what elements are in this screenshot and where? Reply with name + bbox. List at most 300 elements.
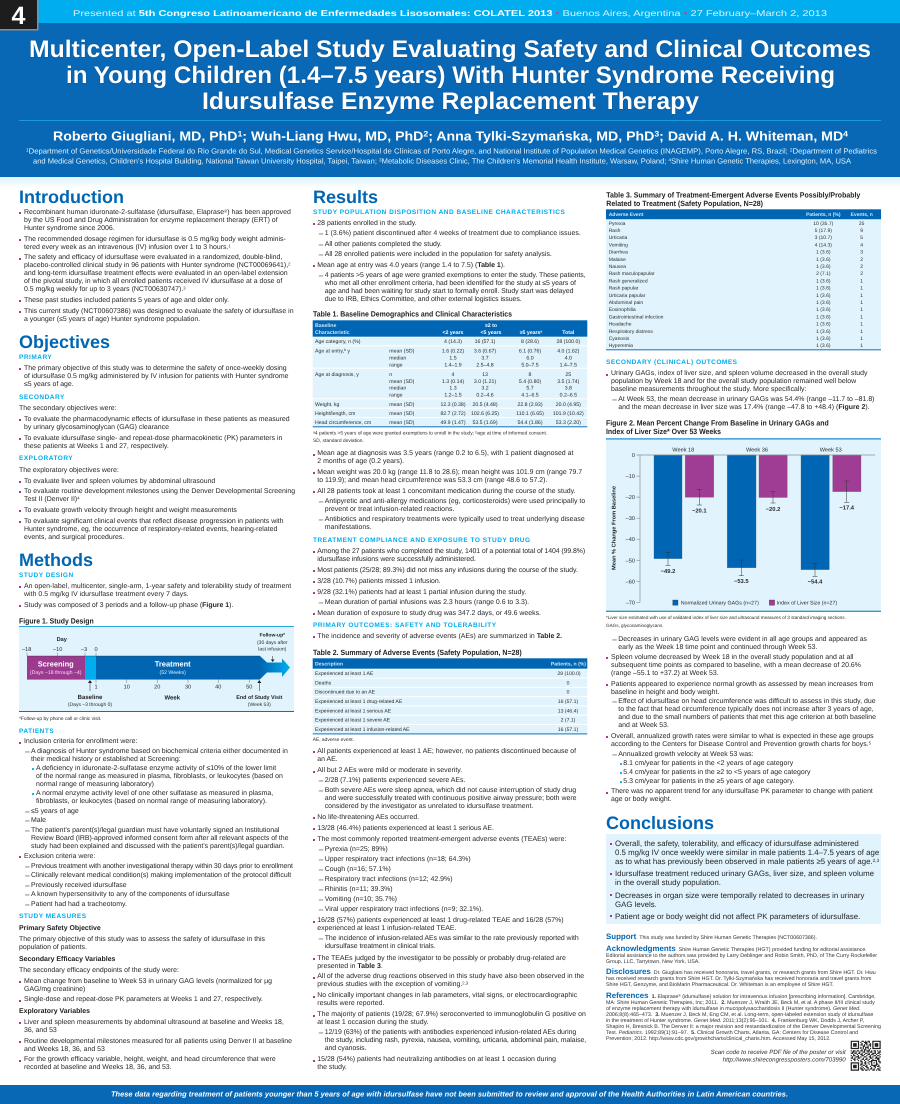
text: exposure: Mean duration of exposure to study drug was 347.2 days, or 49.6 weeks. (317, 610, 541, 617)
top conference band (0, 0, 900, 23)
table rows: 10 (35.7) (813, 221, 834, 227)
table rows: 4 (860, 242, 863, 248)
text: references: of enzyme replacement therapy with idursulfase in mucopolysaccharidosis II (Hunter syndrome). Genet Med. (606, 1006, 861, 1012)
text: viral: Viral upper respiratory tract infections (n=9; 32.1%). (325, 906, 483, 913)
text: developmental milestones: and Weeks 18, 36, and 53 (24, 1046, 105, 1053)
text: spleen: Spleen volume decreased by Week 18 in the overall study population and at all (611, 654, 853, 661)
table rows: 1 (860, 314, 863, 320)
value labels: −17.4 (839, 506, 855, 512)
y axis title: Mean % Change From Baseline (612, 486, 618, 570)
poster number badge (0, 0, 38, 30)
table rows: Experienced at least 1 drug-related AE (315, 699, 403, 705)
text: annualized: according to the Centers for Disease Control and Prevention growth charts for boys.5 (611, 740, 871, 748)
value labels: −20.1 (692, 507, 707, 514)
text: developmental milestones: Routine developmental milestones measured for all patients using Denver II at baseline (24, 1038, 292, 1045)
text: exemptions: 4 patients >5 years of age were granted exemptions to enter the study. These patients, (325, 272, 586, 279)
text: references: MA: Shire Human Genetic Therapies, Inc; 2011. 2. Muenzer J, Wraith JE, Beck M, et al. A phase II/III clinical study (606, 1000, 875, 1006)
text: partial: 9/28 (32.1%) patients had at least 1 partial infusion during the study. (317, 589, 526, 596)
table rows: 16 (57.1) (475, 339, 496, 345)
table rows: Rash maculopapular (609, 271, 655, 277)
table rows: Pyrexia (609, 221, 626, 227)
panel: Results (312, 187, 588, 1071)
text: references: Test. Pediatrics. 1992;89(1):91–97. 5. Clinical Growth Charts. Atlanta, GA: Centers for Disease Control and (606, 1030, 858, 1036)
text: conclusion 2: in the overall study population. (615, 878, 721, 887)
text: current study: This current study (NCT00607386) was designed to evaluate the safety of idursulfase in (24, 308, 294, 315)
y axis labels (626, 453, 635, 606)
scan caption: http://www.shirecongressposters.com/703990 (723, 1056, 846, 1063)
end of study marker: End of Study Visit (236, 695, 283, 701)
heading: Objectives: Objectives (19, 332, 110, 352)
text: exclusion 2: Clinically relevant medical condition(s) making implementation of the protocol difficult (31, 872, 291, 879)
value labels: −20.2 (766, 506, 780, 513)
text: exclusion 4: A known hypersensitivity to any of the components of idursulfase (31, 891, 230, 898)
table rows: 1.4–1.9 (444, 362, 462, 368)
table title (606, 191, 861, 208)
table rows: Nausea (609, 264, 626, 270)
table rows: 3 (10.7) (815, 235, 832, 241)
text: deficiency (36, 765, 283, 789)
text: head circumference: Effect of idursulfase on head circumference was difficult to assess in this study, due (618, 698, 876, 705)
table rows: 1 (3.6) (816, 250, 831, 256)
day axis (22, 637, 98, 656)
text: approval: Recombinant human iduronate-2-sulfatase (idursulfase, Elaprase®) has been approved (24, 208, 291, 216)
table rows: 2 (860, 264, 863, 270)
end of study marker (236, 680, 283, 708)
table header (609, 212, 873, 218)
figure 2 footnote: *Liver size estimated with use of validated index of liver size and ultrasound measures of 3 standard imaging sections. (606, 615, 846, 620)
text: PK trend (611, 788, 873, 804)
table title: Table 3. Summary of Treatment-Emergent Adverse Events Possibly/Probably (606, 191, 861, 200)
text: growth variable: recorded at baseline and Weeks 18, 36, and 53. (24, 1064, 172, 1071)
text: GAG change: GAG/mg creatinine) (24, 986, 85, 993)
text: urinary GAGs (611, 370, 867, 394)
text: infusions: idursulfase infusions were successfully administered. (317, 556, 476, 563)
text: current study (24, 308, 294, 324)
day axis: –10 (53, 647, 62, 653)
authors: Roberto Giugliani, MD, PhD (53, 128, 223, 144)
poster number badge: 4 (12, 2, 26, 30)
text: references (606, 991, 881, 1042)
table rows: 22.8 (2.93) (517, 402, 543, 408)
subheading: patients: PATIENTS (19, 728, 54, 735)
table rows: Deaths (315, 680, 332, 686)
subheading: exploratory variables: Exploratory Variables (19, 1008, 90, 1015)
text: infusions: Among the 27 patients who completed the study, 1401 of a potential total of 1404 (99.8%) (317, 548, 585, 555)
text: GAG change: Mean change from baseline to Week 53 in urinary GAG levels (normalized for μg (24, 978, 272, 985)
text: antibiotics: manifestations. (325, 524, 372, 531)
table rows: 1 (860, 293, 863, 299)
text: lab parameters: results were reported. (317, 1000, 384, 1007)
table rows: 5 (17.9) (815, 228, 832, 234)
text: support: Support This study was funded by Shire Human Genetic Therapies (NCT00607386). (606, 932, 817, 941)
table 3: TEAEs (606, 191, 881, 350)
text: exemptions: age and had been waiting for study start to formally enroll. Study start was delayed (325, 288, 573, 295)
table rows: 25 (859, 221, 865, 227)
table rows: 1 (860, 343, 863, 349)
week labels: Week 53 (820, 446, 842, 453)
text: references: Shapiro H, Bresnick B. The Denver II: a major revision and restandardization of the Denver Developmental Screening (606, 1024, 881, 1030)
text: exemptions: due to IRB, Ethics Committee, and other external logistics issues. (325, 296, 522, 303)
text: primary safety: population of patients. (19, 944, 87, 951)
text: annualized (611, 733, 874, 749)
table header: Patients, n (%) (806, 212, 841, 218)
text: primary objective: of idursulfase 0.5 mg/kg administered by IV infusion for patients with Hunter syndrome (24, 373, 289, 380)
text: vomiting: Vomiting (n=10; 35.7%) (325, 896, 397, 903)
text: neutralizing: 15/28 (54%) patients had neutralizing antibodies on at least 1 occasion during (317, 1056, 556, 1063)
table rows: 102.6 (6.25) (471, 411, 499, 417)
text: prior evaluation: The safety and efficacy of idursulfase were evaluated in a randomized, double-blind, (24, 254, 282, 261)
table rows: 3.8 (565, 386, 572, 392)
table rows: 1 (3.6) (816, 293, 831, 299)
text: diagnosis (31, 748, 288, 764)
table rows: 1 (3.6) (816, 300, 831, 306)
table rows: 3.2 (481, 386, 489, 392)
table rows: 5.7 (526, 386, 534, 392)
table rows: mean (SD) (389, 411, 415, 417)
table rows: 1 (3.6) (816, 336, 831, 342)
table rows: 1 (860, 278, 863, 284)
table header: Description (315, 662, 343, 668)
table rows: 2 (7.1) (816, 271, 831, 277)
text: drug related (317, 917, 564, 933)
table 2 footnote: AE, adverse event. (313, 737, 354, 743)
screening bar (27, 656, 85, 679)
text: references: 2006;8(8):465–473. 3. Muenzer J, Beck M, Eng CM, et al. Long-term, open-labeled extension study of idursulfase (606, 1012, 873, 1018)
text: milestones: To evaluate routine development milestones using the Denver Developmental Screening (24, 488, 295, 495)
table rows: 1 (3.6) (816, 329, 831, 335)
text: pharmacokinetic: these patients at Weeks 1 and 27, respectively. (24, 443, 169, 450)
text: sleep apnea (325, 787, 576, 811)
table rows: 20.5 (4.48) (472, 402, 498, 408)
table rows: 3.7 (481, 356, 489, 362)
table rows: 8 (28.6) (521, 339, 539, 345)
affiliations: 4 (669, 158, 672, 163)
table header: Baseline (315, 323, 336, 329)
text: approval: Hunter syndrome since 2006. (24, 225, 115, 232)
text: pharmacokinetic (24, 435, 282, 451)
table rows: 1.2–1.5 (444, 392, 462, 398)
text: conclusion 1: Overall, the safety, tolerability, and efficacy of idursulfase administered (615, 839, 859, 848)
text: drug related: 16/28 (57%) patients experienced at least 1 drug-related TEAE and 16/28 (57%) (317, 917, 564, 924)
table 2: adverse events (312, 648, 588, 734)
table rows: 53.3 (2.20) (556, 420, 581, 426)
text: design (24, 583, 291, 599)
text: GAG decreases (618, 636, 867, 652)
week axis: 30 (185, 685, 191, 691)
table rows: 1 (860, 336, 863, 342)
table rows: mean (SD) (389, 379, 415, 385)
text: incidence (325, 935, 579, 951)
text: past studies: These past studies included patients 5 years of age and older only. (24, 297, 229, 304)
table rows (315, 671, 581, 733)
panel: Objectives (19, 332, 295, 541)
table rows: Malaise (609, 257, 626, 263)
figure 2 footnote: GAGs, glycosaminoglycans. (606, 623, 663, 628)
week axis: Week (165, 694, 181, 702)
table rows: Rash (609, 228, 621, 234)
text: RTI: Respiratory tract infections (n=12; 42.9%) (325, 876, 453, 883)
top conference band: Presented at 5th Congreso Latinoamericano de Enfermedades Lisosomales: COLATEL 2013 • Buenos Aires, Argentina • 27 February–March 2, 2013 (73, 8, 827, 18)
table rows: 49.9 (1.47) (440, 420, 466, 426)
table rows: 13 (46.4) (558, 708, 578, 714)
text: velocity 2: 5.4 cm/year for patients in the ≥2 to <5 years of age category (623, 769, 810, 776)
text: neutralizing: the study. (317, 1064, 347, 1071)
follow-up label: last infusion) (258, 646, 287, 652)
table rows: Experienced at least 1 AE (315, 671, 374, 677)
text: missed: 3/28 (10.7%) patients missed 1 infusion. (317, 578, 441, 585)
table rows: 5.4 (0.80) (519, 379, 541, 385)
heading: Methods: Methods (19, 550, 93, 570)
table rows: 54.4 (1.86) (517, 420, 543, 426)
week axis: 20 (154, 685, 160, 691)
baseline marker (68, 680, 112, 708)
baseline marker: Baseline (78, 694, 103, 701)
table rows: 1.3 (449, 386, 457, 392)
table rows: Respiratory distress (609, 329, 653, 335)
error bars (666, 481, 849, 576)
panel: support and references (606, 932, 881, 1071)
text: exclusion 3: Previously received idursulfase (31, 882, 127, 889)
table rows: 9 (860, 228, 863, 234)
table rows: Experienced at least 1 infusion-related AE (315, 727, 410, 733)
scan caption (711, 1049, 846, 1063)
text: antibodies (325, 1029, 586, 1053)
text: primary objective: The primary objective of this study was to determine the safety of once-weekly dosing (24, 365, 287, 372)
table rows: Age at diagnosis, y (315, 372, 359, 378)
text: age at diagnosis: Mean age at diagnosis was 3.5 years (range 0.2 to 6.5), with 1 patient diagnosed at (317, 450, 573, 457)
follow-up arrow (260, 656, 290, 679)
text: current study: a younger (≤5 years of age) Hunter syndrome population. (24, 316, 200, 323)
text: drug related: experienced at least 1 infusion-related TEAE. (317, 925, 456, 932)
table rows: 3.5 (1.74) (557, 379, 580, 385)
text: spleen: (range –55.1 to +37.2) at Week 53. (611, 670, 719, 677)
table rows: Gastrointestinal infection (609, 314, 664, 320)
text: male: Male (31, 817, 46, 824)
week axis: 40 (215, 685, 221, 691)
text: prior evaluation: and long-term idursulfase treatment effects were evaluated in an open-label extension (24, 270, 288, 277)
text: approval (24, 209, 291, 233)
text: milestones (24, 488, 295, 504)
text: clinical events: To evaluate significant clinical events that reflect disease progression in patients with (24, 518, 284, 525)
text: diagnosis: their medical history or established at Screening: (31, 756, 181, 763)
subheading: disposition: STUDY POPULATION DISPOSITION AND BASELINE CHARACTERISTICS (313, 209, 565, 216)
text: exclusion 5: Patient had had a tracheotomy. (31, 901, 127, 908)
y axis labels: –30 (626, 516, 635, 522)
text: pharmacodynamic: To evaluate the pharmacodynamic effects of idursulfase in these patients as measured (24, 416, 290, 423)
table rows: 1 (860, 286, 863, 292)
text: head circumference (618, 698, 876, 730)
text: antipyretic (325, 498, 585, 514)
follow-up label (257, 632, 288, 662)
text: GAG decreases: early as the Week 18 time point and continued through Week 53. (618, 644, 817, 651)
text: secondary efficacy intro: The secondary efficacy endpoints of the study were: (19, 967, 179, 974)
y axis labels: –60 (626, 579, 635, 585)
subheading: secondary: SECONDARY (19, 394, 65, 401)
text: clinical events (24, 518, 284, 542)
table rows: Age at entry, (315, 348, 344, 354)
table rows: Headache (609, 322, 632, 328)
table rows: 3 (860, 250, 863, 256)
table rows: Diarrhea (609, 250, 628, 256)
text: conclusion 3: GAG levels. (615, 900, 657, 909)
text: sleep apnea: and were successfully treated with continuous positive airway pressure; both were (325, 795, 576, 802)
text: sleep apnea: considered by the investigator as unrelated to idursulfase treatment. (325, 803, 533, 810)
follow-up label: (30 days after (257, 640, 288, 646)
affiliations: 3 (379, 158, 382, 163)
text: table 3 ref (317, 955, 566, 971)
text: dosage: tered every week as an intravenous (IV) infusion over 1 to 3 hours.1 (24, 243, 231, 251)
title: Multicenter, Open-Label Study Evaluating Safety and Clinical Outcomes (29, 36, 871, 63)
text: incidence: idursulfase treatment in clinical trials. (325, 943, 436, 950)
text: normal growth: Patients appeared to experience normal growth as assessed by mean increases from (611, 681, 873, 688)
text: mean weight: to 119.9); and mean head circumference was 53.3 cm (range 48.6 to 57.2). (317, 477, 547, 484)
table header: ≥2 to (485, 323, 497, 329)
table rows: median (389, 386, 406, 392)
table rows: 110.1 (6.65) (516, 411, 544, 417)
figure 2 footnote (606, 615, 846, 628)
figure 2: bar chart (606, 419, 881, 612)
table header: <2 years (443, 330, 464, 336)
table rows: Discontinued due to an AE (315, 690, 376, 696)
table rows: Head circumference, cm (315, 420, 371, 426)
affiliations: and Medical Genetics, Children’s Hospital Building, National Taiwan University Hospital, Taipei, Taiwan; (33, 157, 370, 166)
table rows: 3.0 (1.21) (474, 379, 496, 385)
text: conclusion 4: Patient age or body weight did not affect PK parameters of idursulfase. (615, 912, 860, 921)
text: all AE (317, 748, 576, 764)
text: conclusion 2: Idursulfase treatment reduced urinary GAGs, liver size, and spleen volume (615, 869, 874, 878)
text: deficiency: of the normal range as measured in plasma, fibroblasts, or leukocytes (based on (36, 773, 283, 780)
subheading: exploratory: EXPLORATORY (19, 455, 73, 462)
text: diagnosis: A diagnosis of Hunter syndrome based on biochemical criteria either documented in (31, 748, 288, 755)
text: completed: All other patients completed the study. (325, 241, 442, 248)
table rows: 2 (860, 257, 863, 263)
table rows: range (389, 362, 403, 368)
table rows: 1 (3.6) (816, 314, 831, 320)
table rows: Age category, n (%) (315, 339, 361, 345)
table header: <5 years (481, 330, 502, 336)
y axis labels: –50 (626, 558, 635, 564)
text: seroconversion: The majority of patients (19/28; 67.9%) seroconverted to immunoglobulin G positive on (317, 1011, 586, 1018)
text: seroconversion: at least 1 occasion during the study. (317, 1019, 429, 1026)
table rows: n (389, 372, 392, 378)
week axis: 1 (94, 685, 98, 691)
table rows: 53.5 (1.69) (472, 420, 498, 426)
y axis labels: –40 (626, 537, 635, 543)
text: acknowledgments: Acknowledgments Shire Human Genetic Therapies (HGT) provided funding for editorial assistance. (606, 944, 867, 953)
text: velocity 3: 5.3 cm/year for patients in the ≥5 years of age category. (623, 778, 794, 785)
table rows: 4.0 (565, 356, 572, 362)
table header: Characteristic (315, 330, 350, 336)
table rows: 4 (14.3) (444, 339, 462, 345)
text: week 53 (618, 396, 874, 412)
table rows: 1 (860, 300, 863, 306)
table rows: 82.7 (2.72) (440, 411, 466, 417)
affiliations: Shire Human Genetic Therapies, Lexington, MA, USA (671, 157, 851, 166)
text: conclusion 1 (615, 839, 879, 866)
text: severe: 2/28 (7.1%) patients experienced severe AEs. (325, 777, 465, 784)
text: prior evaluation: 0.5 mg/kg weekly for up to 3 years (NCT00630747).3 (24, 286, 186, 293)
heading: Results: Results (313, 187, 378, 207)
table rows: 1 (3.6) (816, 343, 831, 349)
text: approval: by the US Food and Drug Administration for enzyme replacement therapy (ERT) of (24, 217, 278, 224)
table rows: 0.2–6.5 (560, 392, 577, 398)
text: spleen (611, 654, 861, 678)
text: exclusion 1: Previous treatment with another investigational therapy within 30 days prior to enrollment (31, 863, 293, 870)
table rows: Urticaria papular (609, 293, 646, 299)
table rows: mean (SD) (389, 348, 415, 354)
text: consent: study had been explained and discussed with the patient’s parent(s)/legal guardian. (31, 843, 284, 850)
day axis: Day (57, 637, 68, 643)
authors: ; David A. H. Whiteman, MD (659, 128, 843, 144)
text: sleep apnea: Both severe AEs were sleep apnea, which did not cause interruption of study drug (325, 787, 576, 794)
table rows: 1 (860, 322, 863, 328)
table rows: 6.1 (0.76) (519, 348, 541, 354)
text: head circumference: to the fact that head circumference typically does not increase after 3 years of age, (618, 706, 874, 713)
text: ADRs: previous studies with the exception of vomiting.2,3 (317, 981, 468, 988)
table header: ≥5 years (520, 330, 540, 336)
conclusions box (606, 834, 881, 924)
affiliations (26, 147, 877, 166)
authors (53, 128, 849, 144)
affiliations: 2 (790, 148, 793, 153)
y axis labels: –10 (626, 474, 635, 480)
text: milestones: Test II (Denver II)4 (24, 495, 80, 503)
table rows: Rash papular (609, 286, 639, 292)
authors: 1 (237, 130, 243, 138)
authors: 3 (654, 130, 660, 138)
text: dosage: The recommended dosage regimen for idursulfase is 0.5 mg/kg body weight adminis- (24, 236, 286, 243)
table header: Total (562, 330, 575, 336)
table rows: 4 (452, 372, 455, 378)
table rows: 12.3 (0.38) (440, 402, 466, 408)
text: normal enzyme: A normal enzyme activity level of one other sulfatase as measured in plasma, (36, 790, 273, 797)
axes (636, 455, 875, 602)
text: neutralizing (317, 1056, 556, 1072)
table rows: Eosinophilia (609, 307, 636, 313)
title (29, 36, 871, 115)
y axis labels: –70 (626, 600, 635, 606)
table rows: 6.0 (526, 356, 534, 362)
text: references: Prevention; 2012. http://www.cdc.gov/growthcharts/clinical_charts.htm. Accessed May 15, 2012. (606, 1036, 831, 1042)
text: exclusion: Exclusion criteria were: (24, 853, 95, 860)
text: concomitant: All 28 patients took at least 1 concomitant medication during the course of the study. (317, 488, 576, 495)
table rows: Experienced at least 1 serious AE (315, 708, 392, 714)
table rows: 0 (567, 680, 570, 686)
table rows: 1 (3.6) (816, 264, 831, 270)
table rows: 5 (860, 235, 863, 241)
text: week 53: and the mean decrease in liver size was 17.4% (range –47.8 to +48.4) (Figure 2). (618, 404, 870, 411)
table rows: 4.0 (1.62) (557, 348, 580, 354)
subheading: secondary outcomes: SECONDARY (CLINICAL) OUTCOMES (606, 359, 738, 366)
figure title: Index of Liver Size* Over 53 Weeks (606, 427, 721, 436)
text: disclosures: Shire HGT, Genzyme, and BioMarin Pharmaceutical. Dr. Whiteman is an employee of Shire HGT. (606, 982, 834, 988)
table rows: 8 (529, 372, 532, 378)
table rows: mean (SD) (389, 402, 415, 408)
table rows: 5.0–7.5 (521, 362, 539, 368)
table 1: baseline demographics (312, 310, 588, 428)
table 1 footnote: age at time of informed consent. (477, 430, 547, 436)
text: conclusion 3 (615, 891, 864, 909)
header banner (0, 0, 900, 177)
table rows: 2.5–4.8 (476, 362, 494, 368)
screening bar: (Days –18 through –4) (30, 670, 82, 676)
text: growth: To evaluate growth velocity through height and weight measurements (24, 507, 237, 514)
value labels (661, 506, 855, 586)
text: PK trend: There was no apparent trend for any idursulfase PK parameter to change with patient (611, 788, 873, 795)
panel: Methods (19, 550, 294, 1071)
text: discontinued: 1 (3.6%) patient discontinued after 4 weeks of treatment due to compliance issues. (325, 230, 581, 237)
text: exemptions: who met all other enrollment criteria, had been identified for the study at ≤5 years of (325, 280, 576, 287)
